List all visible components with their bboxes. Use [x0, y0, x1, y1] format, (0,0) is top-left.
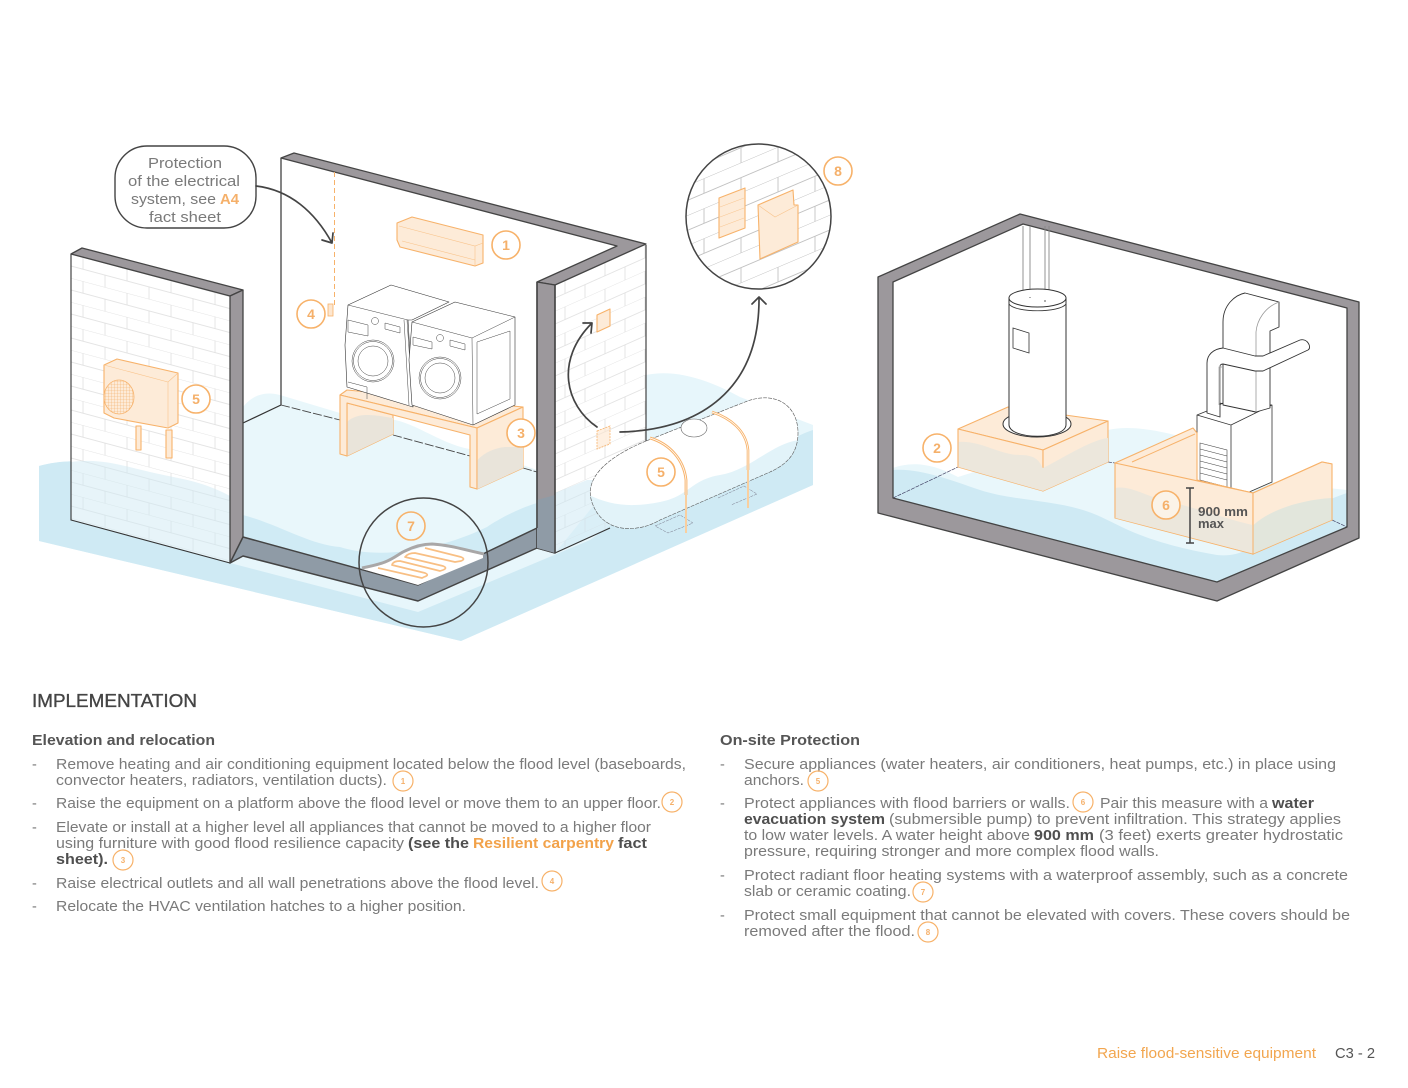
heading: implementation: IMPLEMENTATION: [32, 690, 197, 711]
floor slab: [230, 528, 555, 601]
list item 2: (submersible pump) to prevent infiltration. This strategy applies: [889, 812, 1341, 828]
detail circle: radiant floor: [359, 498, 488, 627]
badge 6: [1152, 491, 1180, 519]
list item 1: convector heaters, radiators, ventilation ducts).: [56, 773, 387, 789]
badge 4: 4: [307, 306, 315, 322]
right illustration: basement with water heater and furnace: [878, 214, 1359, 601]
list item 3: Resilient carpentry: [473, 836, 614, 852]
icon: small outlet cover on wall: [597, 309, 610, 332]
arrow: outlet to detail circle: [620, 297, 766, 432]
list item 4: removed after the flood.: [744, 924, 915, 940]
list item 3: 3: [121, 856, 126, 865]
flood water ground: [39, 373, 813, 641]
list item 1: [720, 757, 1336, 791]
callout: electrical system: Protection: [148, 155, 222, 172]
list item 2: 900 mm: [1034, 828, 1094, 844]
wall top and pier: [281, 153, 646, 553]
list item 4: Protect small equipment that cannot be elevated with covers. These covers should be: [744, 908, 1350, 924]
list item 3: using furniture with good flood resilience capacity: [56, 836, 405, 852]
list item 3: -: [720, 868, 725, 884]
list item 1: -: [720, 757, 725, 773]
badge 1: 1: [502, 237, 510, 253]
list item 3: -: [32, 820, 37, 836]
fuel tank with anchors: [589, 398, 798, 533]
arrow: callout to outlet line: [256, 186, 333, 243]
list item 3: Protect radiant floor heating systems with a waterproof assembly, such as a concrete: [744, 868, 1348, 884]
badge 3: [507, 419, 535, 447]
footer: C3 - 2: [1335, 1046, 1375, 1062]
list item 4: Raise electrical outlets and all wall penetrations above the flood level.: [56, 876, 539, 892]
list item 2: to low water levels. A water height above: [744, 828, 1030, 844]
badge 4: [297, 300, 325, 328]
badge 5 heat pump: [182, 385, 210, 413]
callout: electrical system: fact sheet: [149, 209, 222, 226]
badge 7: 7: [407, 518, 415, 534]
badge 5 tank: [647, 458, 675, 486]
list item 2: Raise the equipment on a platform above the flood level or move them to an upper floor.: [56, 796, 661, 812]
column: elevation and relocation: [32, 733, 686, 915]
list item 2: 2: [670, 798, 675, 807]
list item 2: [720, 792, 1343, 860]
subheading: Elevation and relocation: [32, 733, 215, 749]
bench platform: [340, 390, 523, 489]
room interior and water: [893, 224, 1347, 582]
badge 2: 2: [933, 440, 941, 456]
list item 1: 1: [401, 777, 406, 786]
list item 3: 7: [921, 888, 926, 897]
footer: Raise flood-sensitive equipment: [1097, 1046, 1316, 1062]
icon: air conditioner: [397, 217, 483, 266]
list item 2: Protect appliances with flood barriers or walls.: [744, 796, 1070, 812]
water heater platform: [958, 407, 1108, 491]
height marker: 900 mm max: [1186, 488, 1248, 543]
icon: raised outlet: [328, 304, 333, 316]
callout: electrical system: [115, 146, 256, 228]
callout: electrical system: A4: [220, 191, 240, 208]
list item 2: evacuation system: [744, 812, 885, 828]
list item 3: fact: [618, 836, 647, 852]
list item 4: 4: [550, 877, 555, 886]
number badges on left illustration: [182, 157, 852, 540]
list item 2: 6: [1081, 798, 1086, 807]
detail circle: outlet covers: [686, 144, 831, 289]
list item 2: water: [1271, 796, 1314, 812]
list item 1: Remove heating and air conditioning equipment located below the flood level (baseboards,: [56, 757, 686, 773]
subheading: On-site Protection: [720, 733, 860, 749]
badge 7: [397, 512, 425, 540]
badge 3: 3: [517, 425, 525, 441]
list item 2: (3 feet) exerts greater hydrostatic: [1099, 828, 1343, 844]
badge 8: 8: [834, 163, 842, 179]
badge 5 tank: 5: [657, 464, 665, 480]
list item 1: Secure appliances (water heaters, air conditioners, heat pumps, etc.) in place using: [744, 757, 1336, 773]
list item 2: pressure, requiring stronger and more complex flood walls.: [744, 844, 1159, 860]
arrow: low outlet to raised outlet: [568, 323, 597, 427]
badge 5 heat pump: 5: [192, 391, 200, 407]
list item 4: [32, 871, 562, 892]
list item 1: anchors.: [744, 773, 804, 789]
badge 1: [492, 231, 520, 259]
left illustration: elevated equipment in a flooded building: [39, 144, 852, 641]
height marker: 900 mm max: max: [1198, 517, 1224, 531]
list item 1: -: [32, 757, 37, 773]
room interior: [243, 158, 617, 585]
washing machine: [345, 285, 449, 407]
badge 6: 6: [1162, 497, 1170, 513]
list item 3: [32, 820, 651, 870]
list item 3: Elevate or install at a higher level all appliances that cannot be moved to a higher floor: [56, 820, 651, 836]
callout: electrical system: system, see: [131, 191, 216, 208]
building section walls: [878, 214, 1359, 601]
left brick wall: [71, 248, 243, 563]
electrical line dashed: [334, 172, 336, 305]
list item 4: -: [32, 876, 37, 892]
water heater: [1003, 226, 1071, 437]
list item 4: 8: [926, 928, 931, 937]
badge 2: [923, 434, 951, 462]
furnace with ducts: [1197, 293, 1310, 500]
list item 2: Pair this measure with a: [1100, 796, 1269, 812]
list item 3: [720, 868, 1348, 902]
list item 2: -: [32, 796, 37, 812]
list item 1: [32, 757, 686, 791]
list item 1: 5: [816, 777, 821, 786]
badge 8: [824, 157, 852, 185]
list item 3: sheet).: [56, 852, 108, 868]
list item 4: -: [720, 908, 725, 924]
right brick wall: [555, 245, 646, 553]
flood wall barrier: [1115, 428, 1332, 554]
list item 2: -: [720, 796, 725, 812]
list item 3: slab or ceramic coating.: [744, 884, 911, 900]
icon: wall-mounted heat pump: [104, 359, 178, 458]
list item 4: [720, 908, 1350, 942]
list item 5: Relocate the HVAC ventilation hatches to a higher position.: [56, 899, 466, 915]
list item 3: (see the: [408, 836, 469, 852]
list item 2: [32, 792, 682, 812]
height marker: 900 mm max: 900 mm: [1198, 505, 1248, 519]
callout: electrical system: of the electrical: [128, 173, 240, 190]
column: on-site protection: [720, 733, 1350, 942]
icon: low outlet dashed: [597, 426, 610, 449]
list item 5: -: [32, 899, 37, 915]
dryer: [409, 302, 515, 425]
